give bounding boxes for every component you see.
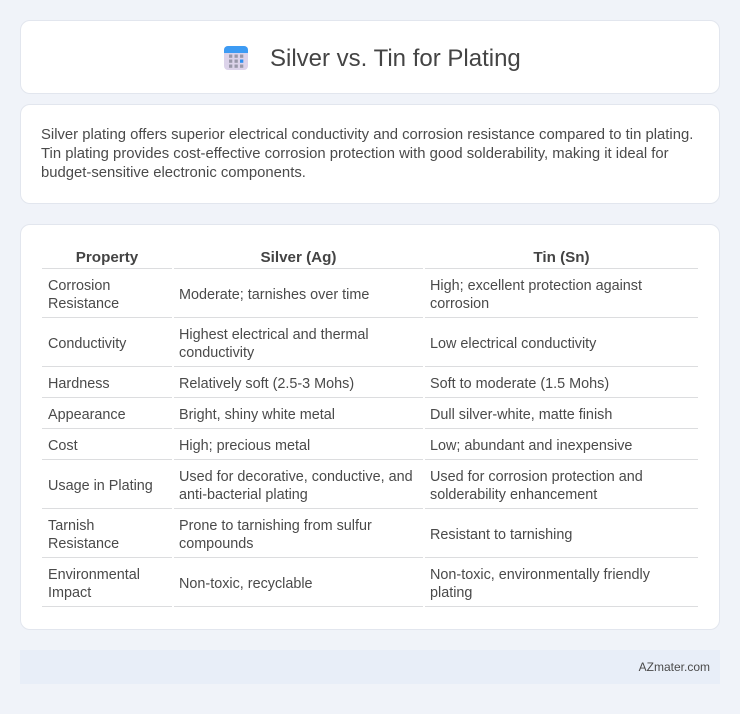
row: Conductivity: Conductivity (48, 336, 126, 352)
row: Corrosion Resistance (48, 278, 119, 312)
title: Silver vs. Tin for Plating (270, 45, 521, 72)
comparison table panel: Low electrical conductivity (430, 336, 596, 352)
intro paragraph: budget-sensitive electronic components. (41, 165, 306, 181)
comparison table panel: Used for corrosion protection and (430, 469, 643, 485)
row: Corrosion Resistance: Resistance (48, 296, 119, 312)
row: Usage in Plating: Usage in Plating (48, 478, 153, 494)
row: Tarnish Resistance: Tarnish (48, 518, 94, 534)
intro paragraph (41, 127, 693, 181)
comparison table panel: Non-toxic, environmentally friendly (430, 567, 650, 583)
row: Tarnish Resistance (48, 518, 119, 552)
header: Tin (Sn): Tin (Sn) (533, 249, 590, 266)
footer bar (20, 650, 720, 684)
comparison table panel: anti-bacterial plating (179, 487, 308, 503)
comparison table panel: solderability enhancement (430, 487, 597, 503)
comparison table panel: plating (430, 585, 472, 601)
row: Appearance: Appearance (48, 407, 126, 423)
comparison table panel: Moderate; tarnishes over time (179, 287, 369, 303)
row: Environmental Impact: Environmental (48, 567, 140, 583)
comparison table panel: Non-toxic, recyclable (179, 576, 313, 592)
comparison table panel: Relatively soft (2.5-3 Mohs) (179, 376, 354, 392)
comparison table panel: Resistant to tarnishing (430, 527, 572, 543)
row: Environmental Impact: Impact (48, 585, 91, 601)
comparison table panel: Highest electrical and thermal (179, 327, 369, 343)
footer credit: AZmater.com (639, 660, 710, 674)
comparison table panel: High; precious metal (179, 438, 310, 454)
row: Corrosion Resistance: Corrosion (48, 278, 110, 294)
comparison table panel: Low; abundant and inexpensive (430, 438, 632, 454)
intro text panel (20, 104, 720, 204)
comparison table panel: Bright, shiny white metal (179, 407, 335, 423)
header: Property: Property (76, 249, 138, 266)
title card (20, 20, 720, 94)
comparison table panel: compounds (179, 536, 253, 552)
header: Silver (Ag): Silver (Ag) (261, 249, 336, 266)
intro paragraph: Silver plating offers superior electrical conductivity and corrosion resistance compared to tin plating. (41, 127, 693, 143)
row: Tarnish Resistance: Resistance (48, 536, 119, 552)
comparison table panel: Prone to tarnishing from sulfur (179, 518, 372, 534)
comparison table panel: conductivity (179, 345, 254, 361)
comparison table panel: Soft to moderate (1.5 Mohs) (430, 376, 609, 392)
comparison table panel: Used for decorative, conductive, and (179, 469, 413, 485)
comparison table panel (20, 224, 720, 630)
intro paragraph: Tin plating provides cost-effective corrosion protection with good solderability, making it ideal for (41, 146, 669, 162)
icon: calendar (224, 46, 248, 70)
row: Environmental Impact (48, 567, 140, 601)
comparison table panel: Dull silver-white, matte finish (430, 407, 612, 423)
row: Hardness: Hardness (48, 376, 110, 392)
comparison table panel: corrosion (430, 296, 489, 312)
comparison table panel: High; excellent protection against (430, 278, 642, 294)
row: Cost: Cost (48, 438, 78, 454)
